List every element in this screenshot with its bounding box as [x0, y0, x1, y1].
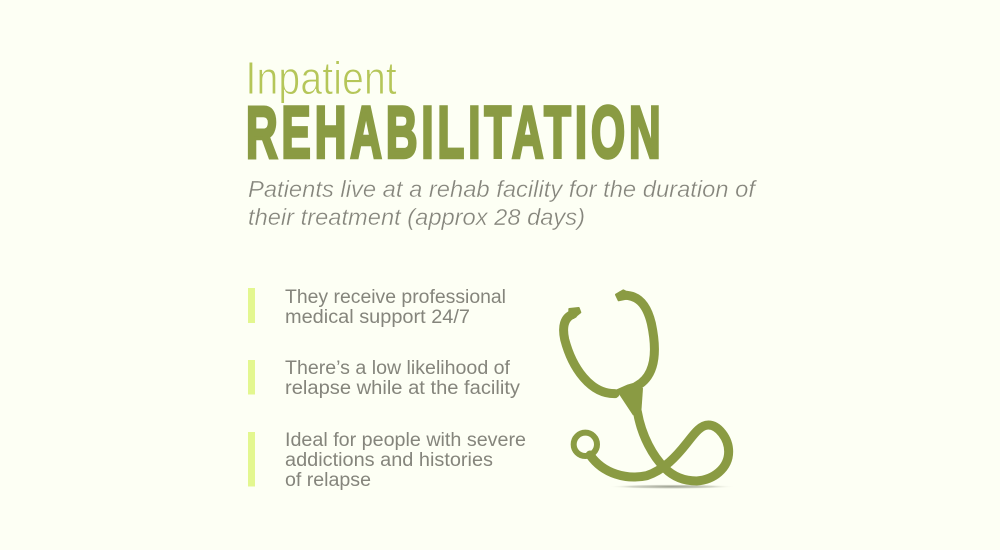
- subtitle text: their treatment (approx 28 days): [248, 204, 585, 230]
- list item 2: relapse while at the facility: [285, 378, 521, 399]
- list item 3: Ideal for people with severe: [285, 430, 526, 451]
- list item 2: [248, 358, 521, 399]
- chest piece ring: [574, 433, 597, 456]
- stethoscope tubes: [564, 295, 729, 481]
- list item 3: of relapse: [285, 470, 371, 491]
- list item 2: There’s a low likelihood of: [285, 358, 511, 379]
- title: Inpatient: Inpatient: [246, 53, 397, 105]
- icon: stethoscope: [564, 290, 736, 489]
- title: REHABILITATION: REHABILITATION: [246, 92, 661, 173]
- subtitle text: Patients live at a rehab facility for the duration of: [248, 176, 758, 202]
- list item 1: They receive professional: [285, 287, 506, 308]
- list item 3: addictions and histories: [285, 450, 493, 471]
- list item 1: [248, 287, 506, 328]
- list item 3: [248, 430, 526, 491]
- subtitle text: [248, 176, 758, 230]
- tube junction: [616, 382, 643, 415]
- ear tips: [569, 290, 628, 318]
- stethoscope shadow: [608, 484, 736, 489]
- list item 1: medical support 24/7: [285, 307, 470, 328]
